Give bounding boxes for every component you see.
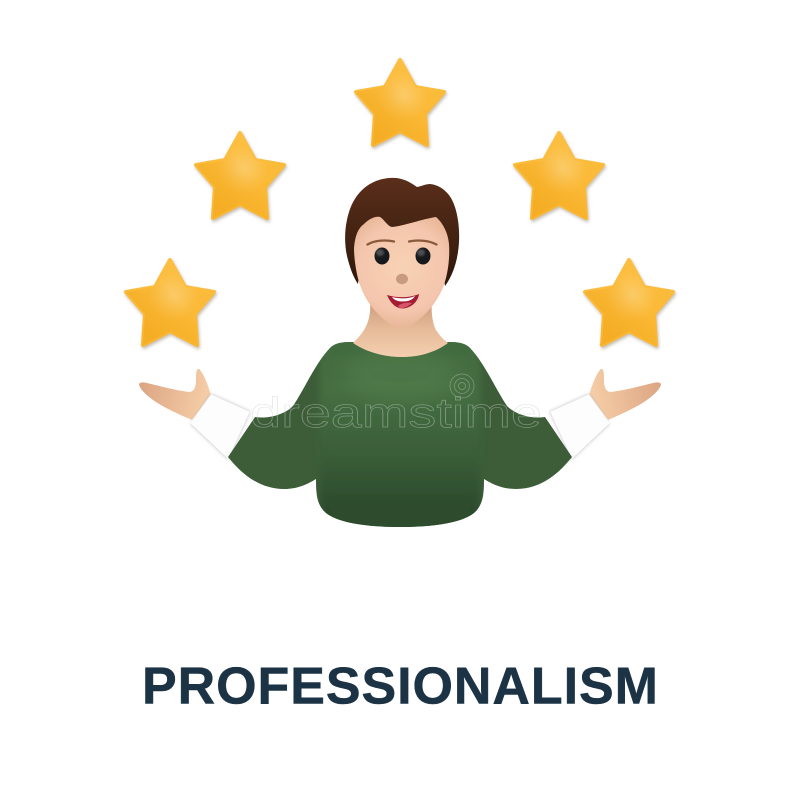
left cuff xyxy=(191,395,249,458)
face xyxy=(354,217,449,329)
neck xyxy=(353,300,448,357)
illustration canvas xyxy=(124,58,678,704)
person xyxy=(139,178,661,540)
right eye xyxy=(416,248,430,264)
star 4 upper right xyxy=(515,133,604,220)
right cuff xyxy=(551,395,609,458)
sweater xyxy=(228,342,572,527)
left hand xyxy=(139,369,211,420)
stock watermark xyxy=(250,374,542,436)
hair back xyxy=(345,178,459,286)
star 5 far right xyxy=(585,260,674,347)
star 3 top centre xyxy=(356,60,445,147)
right eyebrow xyxy=(409,240,436,244)
title: PROFESSIONALISM xyxy=(142,658,658,716)
star 1 far left xyxy=(126,260,215,347)
left eye xyxy=(374,248,390,264)
stock watermark: dreamstime xyxy=(250,389,542,436)
nose xyxy=(396,274,408,284)
mouth xyxy=(387,294,419,308)
star 2 upper left xyxy=(196,133,285,220)
right hand xyxy=(589,369,661,420)
left eyebrow xyxy=(368,240,394,244)
torso shading xyxy=(320,325,480,540)
